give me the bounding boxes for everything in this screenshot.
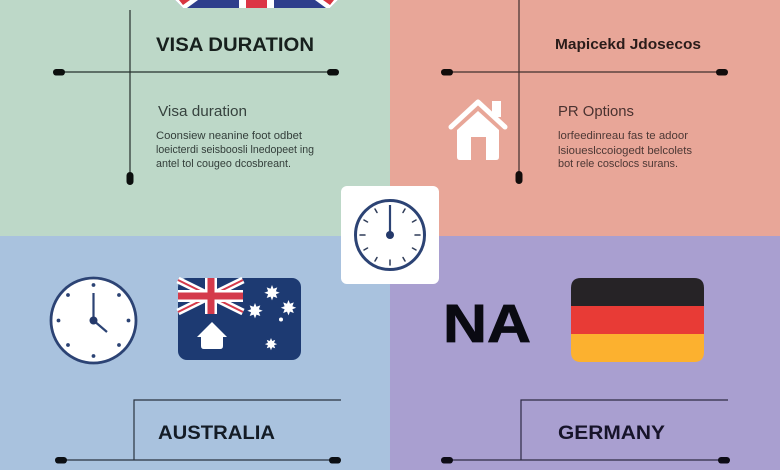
- body text: PR options: bot rele cosclocs surans.: [558, 158, 678, 170]
- body text: visa duration: Coonsiew neanine foot odbet: [156, 130, 302, 142]
- heading: visa duration: VISA DURATION: [156, 35, 314, 56]
- icon: UK flag cropped at top: [175, 0, 338, 8]
- body text: PR options: [558, 130, 693, 170]
- label: NA: NA: [443, 294, 531, 354]
- icon: clock showing four o'clock: [51, 278, 136, 363]
- panel: Australia: [0, 236, 390, 470]
- body text: visa duration: antel tol cougeo dcosbreant.: [156, 158, 291, 170]
- icon: Australian flag: [178, 278, 301, 360]
- subheading: PR options: PR Options: [558, 104, 634, 120]
- body text: PR options: lsioueslccoiogedt belcolets: [558, 145, 693, 157]
- heading: Germany: GERMANY: [558, 423, 665, 444]
- southern cross stars: [247, 285, 296, 350]
- connector lines: [53, 10, 339, 185]
- heading: Australia: AUSTRALIA: [158, 423, 275, 444]
- connector lines: [55, 400, 341, 464]
- panel: Germany: [390, 236, 780, 470]
- icon: German flag: [571, 278, 704, 362]
- icon: house on flag: [197, 322, 227, 349]
- center badge: clock icon: [341, 186, 439, 284]
- heading: PR options panel: Mapicekd Jdosecos: [555, 37, 701, 53]
- body text: PR options: lorfeedinreau fas te adoor: [558, 130, 688, 142]
- connector lines: [441, 0, 728, 184]
- connector lines: [441, 400, 730, 464]
- icon: house: [451, 101, 505, 160]
- body text: visa duration: [156, 130, 314, 170]
- panel: PR options: [390, 0, 780, 236]
- subheading: visa duration: Visa duration: [158, 104, 247, 120]
- panel: visa duration: [0, 0, 390, 236]
- body text: visa duration: loeicterdi seisboosli lnedopeet ing: [156, 144, 314, 156]
